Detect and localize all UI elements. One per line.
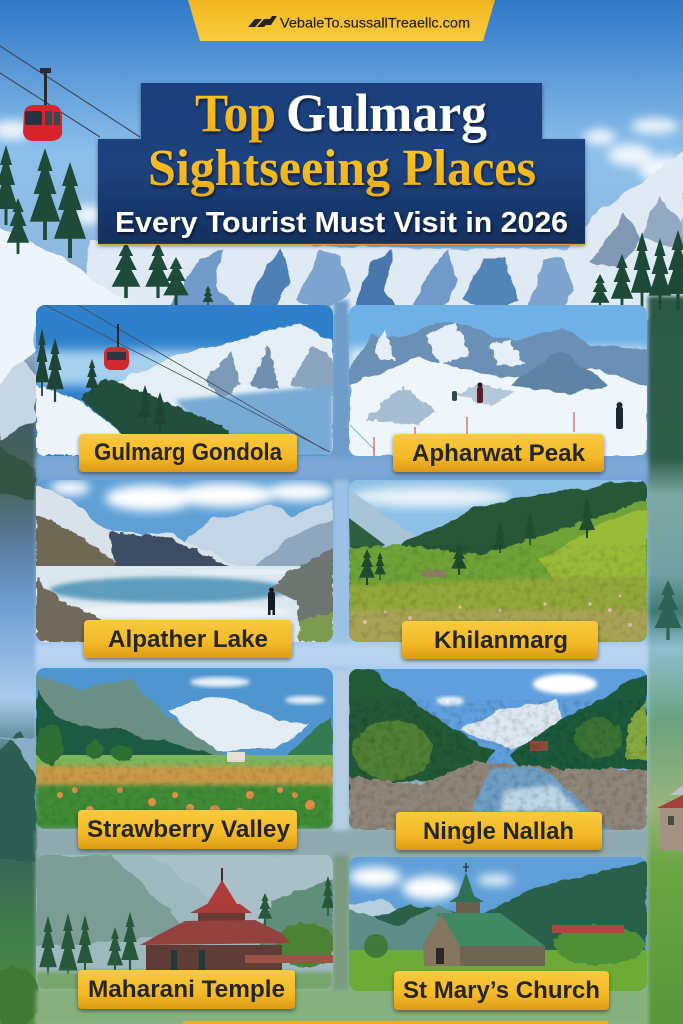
photo: temple bbox=[36, 855, 335, 992]
title line 2: Sightseeing Places bbox=[148, 140, 536, 197]
label: Gulmarg Gondola bbox=[79, 434, 297, 472]
photo: green meadow bbox=[349, 480, 647, 642]
title word Top: Top bbox=[195, 83, 276, 143]
label: Maharani Temple bbox=[78, 970, 295, 1009]
left margin shapes bbox=[0, 345, 36, 860]
church building bbox=[423, 863, 545, 966]
left snow slope bbox=[0, 225, 130, 395]
subtitle: Every Tourist Must Visit in 2026 bbox=[115, 207, 568, 239]
label: Alpather Lake: Alpather Lake bbox=[108, 626, 268, 653]
title panel bbox=[98, 83, 585, 244]
gondola top left bbox=[0, 46, 140, 141]
conifers top right bbox=[590, 230, 683, 640]
label: Gulmarg Gondola: Gulmarg Gondola bbox=[94, 439, 283, 466]
label: Alpather Lake bbox=[84, 620, 292, 658]
website text: VebaleTo.sussallTreaellc.com bbox=[280, 14, 470, 30]
distant snow mountains bbox=[80, 150, 683, 320]
label: Khilanmarg bbox=[402, 621, 598, 659]
photo: church bbox=[349, 857, 647, 995]
label: Khilanmarg: Khilanmarg bbox=[434, 627, 568, 654]
building at right edge bbox=[657, 785, 683, 850]
card: Strawberry Valley bbox=[36, 668, 333, 849]
card: Gulmarg Gondola bbox=[35, 305, 333, 472]
temple building bbox=[140, 868, 333, 970]
label: Strawberry Valley bbox=[78, 810, 297, 849]
bottom gold strip bbox=[183, 1021, 608, 1024]
card: Maharani Temple bbox=[36, 855, 335, 1009]
card: St Mary's Church bbox=[349, 857, 647, 1010]
photo: alpine lake bbox=[36, 480, 334, 642]
label: Ningle Nallah: Ningle Nallah bbox=[423, 818, 574, 845]
photo: flower valley bbox=[36, 668, 333, 829]
title word Gulmarg: Gulmarg bbox=[286, 83, 487, 143]
logo banner bbox=[188, 0, 495, 41]
label: St Mary's Church bbox=[394, 971, 609, 1010]
photo: snow peaks and skiers bbox=[349, 305, 647, 456]
card: Alpather Lake bbox=[36, 480, 334, 658]
photo: mountain stream bbox=[349, 669, 647, 830]
central gaps bbox=[36, 300, 647, 1024]
card: Apharwat Peak bbox=[349, 305, 647, 472]
label: Maharani Temple: Maharani Temple bbox=[88, 976, 285, 1003]
label: Ningle Nallah bbox=[396, 812, 602, 850]
margin bands bbox=[0, 296, 683, 1024]
bush bottom left bbox=[0, 967, 40, 1024]
logo icon bbox=[248, 16, 277, 27]
label: Apharwat Peak: Apharwat Peak bbox=[412, 440, 586, 467]
conifers top left bbox=[0, 145, 214, 306]
clouds bbox=[0, 118, 683, 225]
label: Strawberry Valley: Strawberry Valley bbox=[87, 816, 291, 843]
card: Khilanmarg bbox=[349, 480, 647, 659]
label: Apharwat Peak bbox=[393, 434, 604, 472]
label: St Mary's Church: St Mary’s Church bbox=[403, 977, 600, 1004]
card: Ningle Nallah bbox=[349, 669, 647, 850]
photo: gondola and snow mountain bbox=[35, 305, 333, 456]
